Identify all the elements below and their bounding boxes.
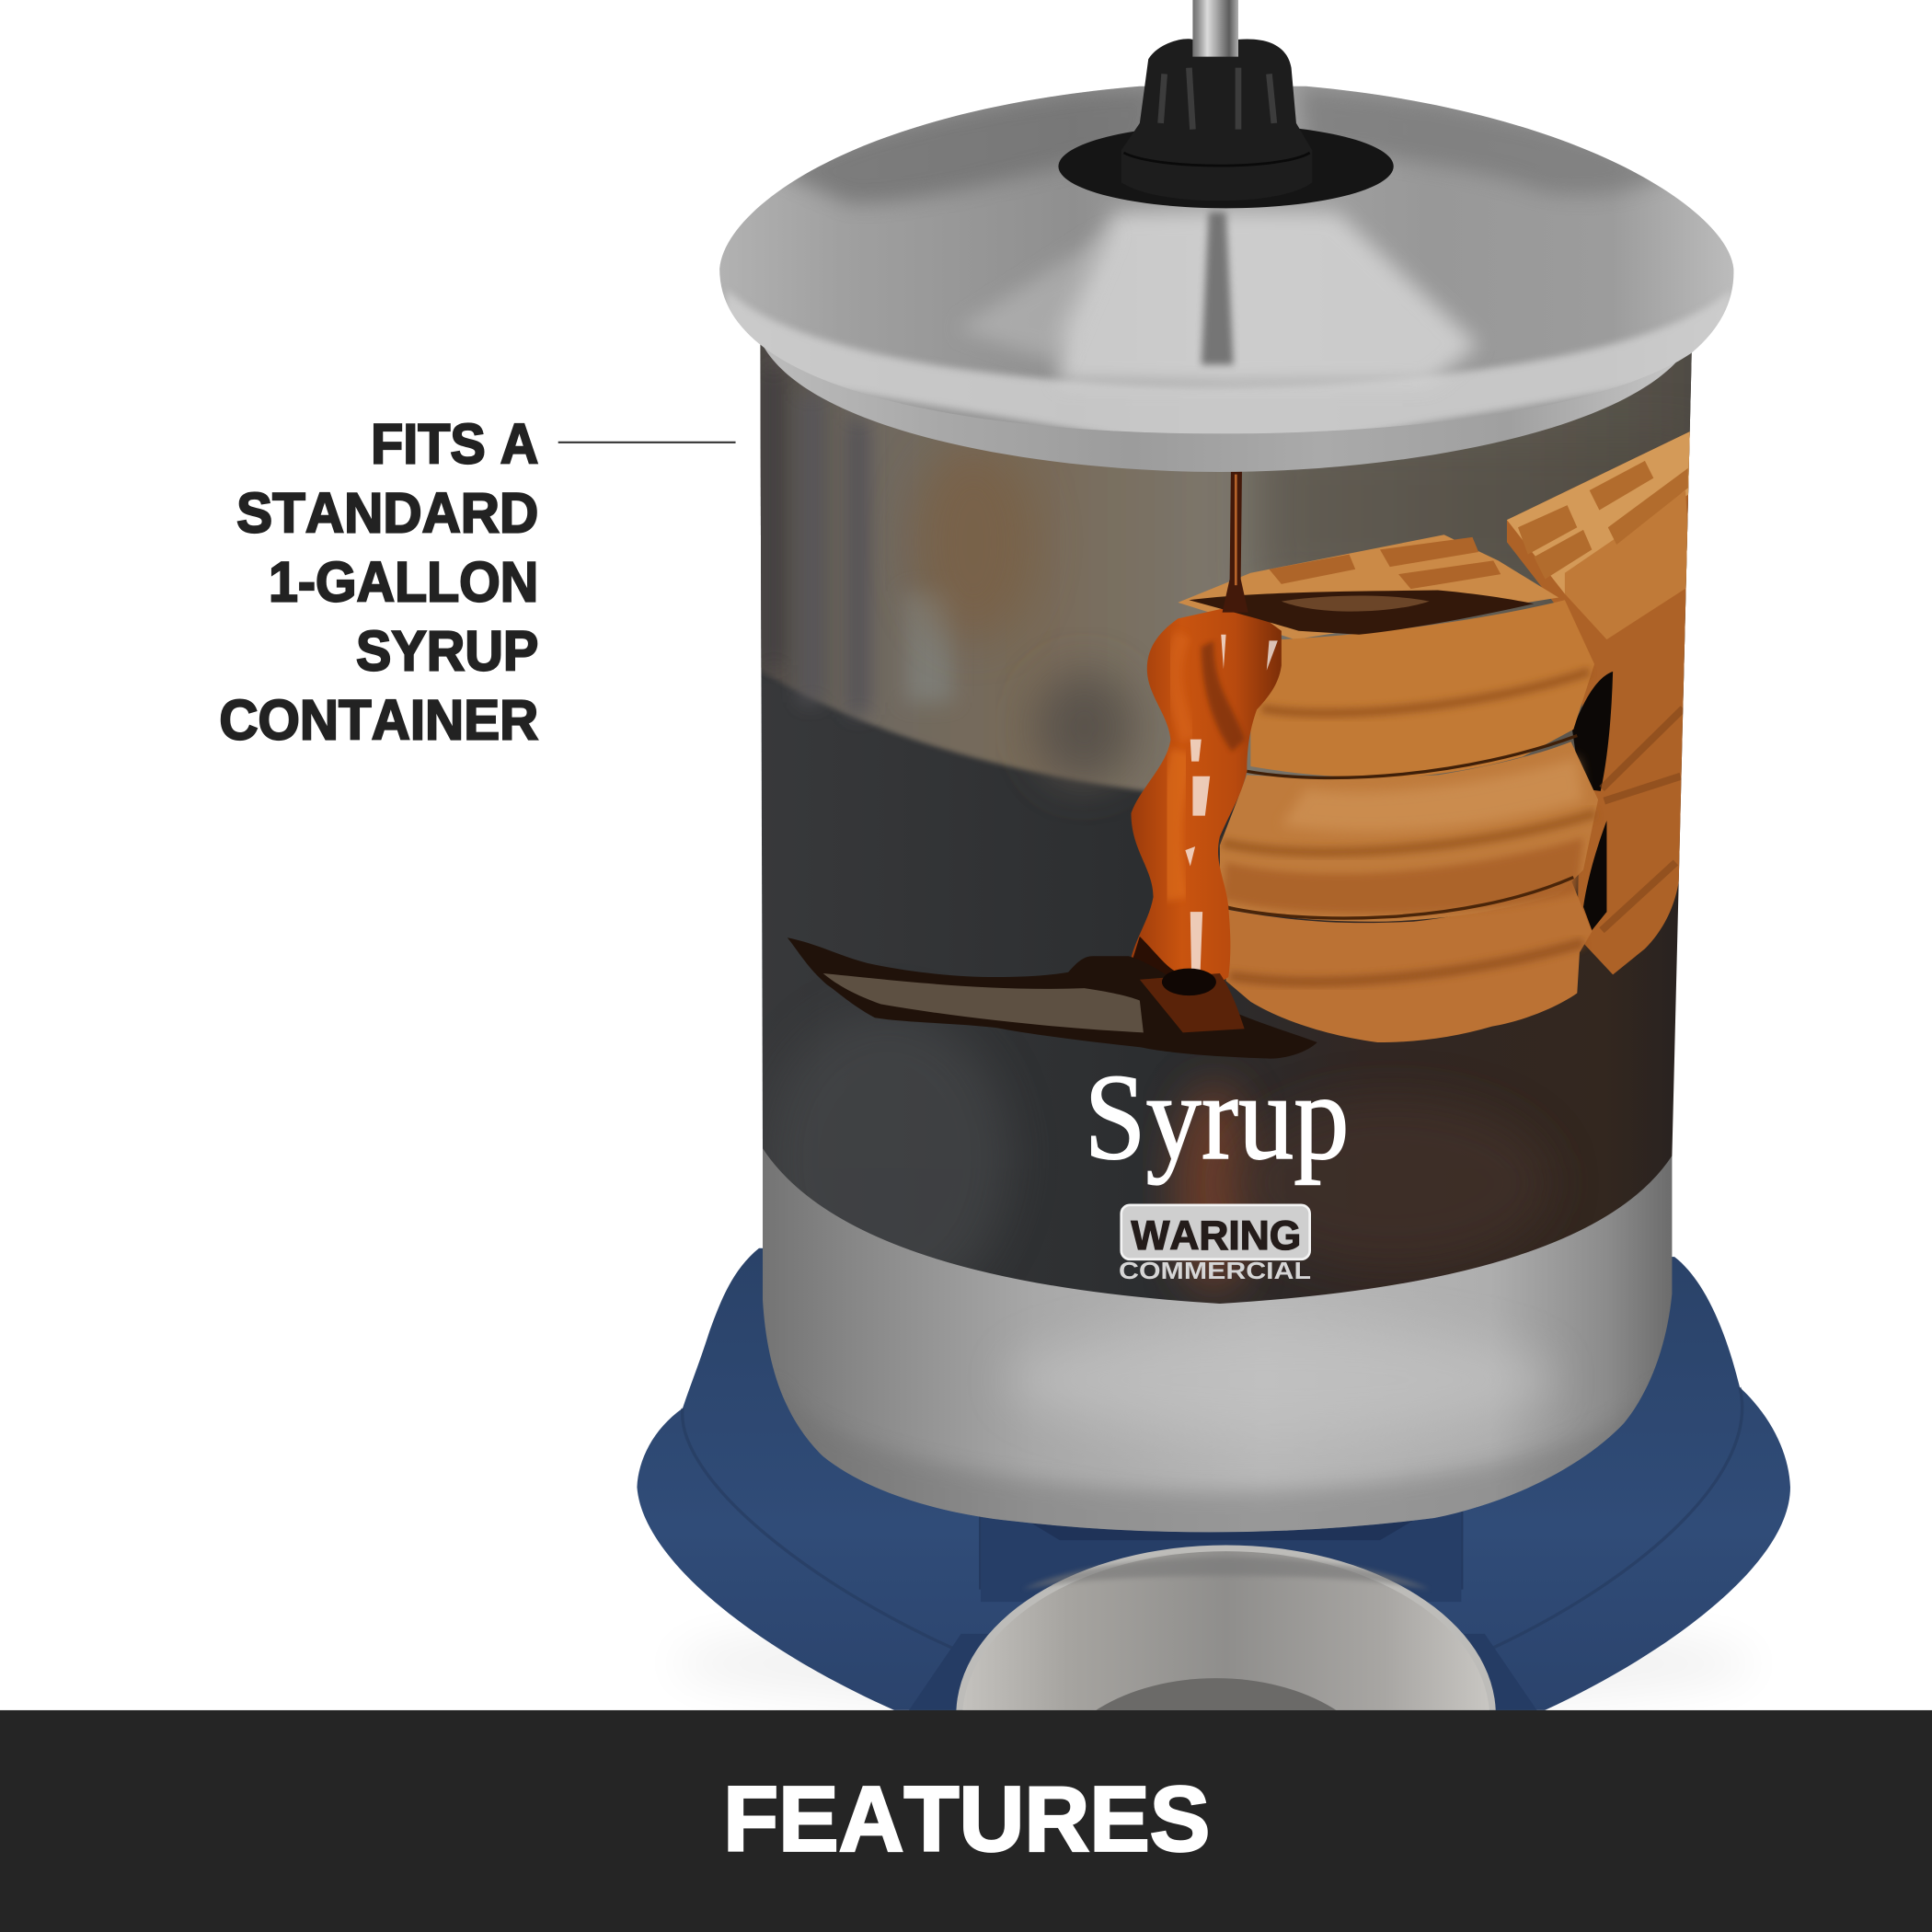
callout: fits a standard 1-gallon syrup container: SYRUP [356,620,538,684]
logo plate: COMMERCIAL [1119,1259,1311,1284]
lid opening [1058,124,1394,208]
reflection on table [1174,1085,1253,1294]
callout: fits a standard 1-gallon syrup container: FITS A [371,413,538,477]
syrup pouring down [1129,604,1282,993]
footer heading: FEATURES [723,1768,1210,1871]
footer bar [0,1710,1932,1932]
lid dome [719,86,1733,433]
lid lower rim [754,320,1698,472]
blue base [637,1248,1790,1715]
callout: fits a standard 1-gallon syrup container: STANDARD [236,482,538,546]
waffle 1 [1247,600,1594,777]
syrup puddle [788,937,1317,1059]
syrup pool on waffle [1189,591,1534,635]
callout: fits a standard 1-gallon syrup container: 1-GALLON [269,551,538,615]
callout leader line [558,442,736,443]
lid shading [719,86,1737,456]
waffle top surface [1178,535,1558,639]
waffle 3 [1226,880,1592,1042]
dispenser illustration [637,0,1790,1886]
rod [1192,0,1238,59]
waffle 2 [1220,742,1598,922]
drip tray [956,1546,1496,1710]
syrup stream [1223,468,1248,613]
blurred wall backdrop [752,333,1700,801]
product name: Syrup [1085,1049,1350,1185]
product label panel [752,333,1700,1318]
back waffle stack [1507,431,1691,974]
knob [1121,39,1312,201]
canister steel band [763,1148,1672,1532]
logo plate: WARING [1131,1213,1301,1259]
logo plate [1119,1205,1311,1284]
table sheen [784,1023,1005,1265]
band highlight [806,1341,1625,1533]
callout: fits a standard 1-gallon syrup container [219,413,538,753]
callout: fits a standard 1-gallon syrup container: CONTAINER [219,689,538,753]
